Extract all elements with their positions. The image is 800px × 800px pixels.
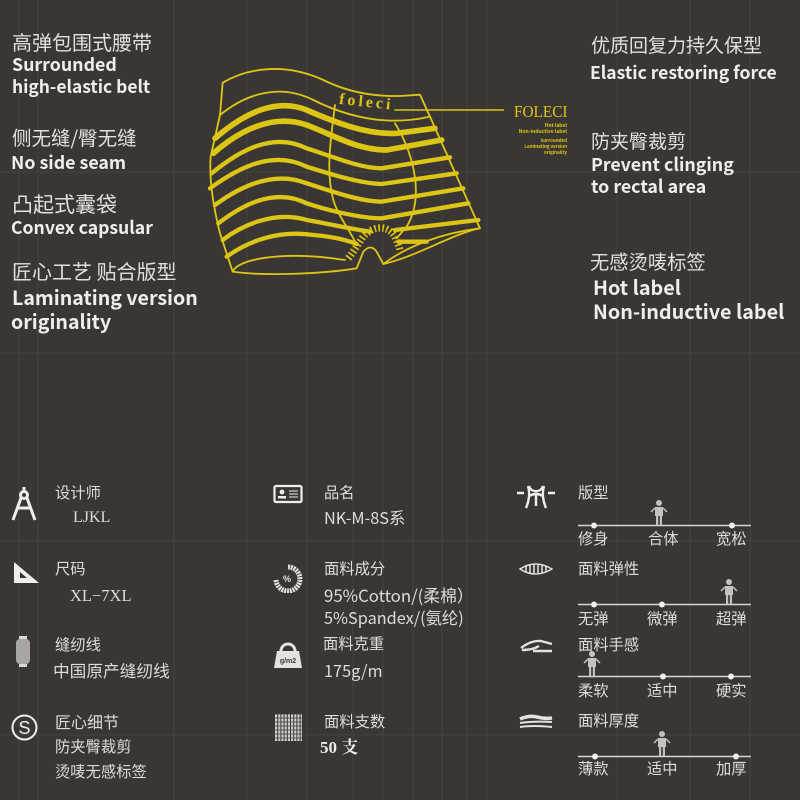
spec: thread xyxy=(16,633,170,682)
label callout: FOLECI: Hot label xyxy=(545,122,567,129)
icon: hand xyxy=(520,640,552,652)
spec: yarn count xyxy=(275,710,385,757)
heading: laminating version: 匠心工艺 贴合版型 xyxy=(12,256,176,285)
heading: convex capsular: 凸起式囊袋 xyxy=(12,189,117,219)
label callout: FOLECI: Surrounded xyxy=(540,138,567,144)
spec: craft detail: 防夹臀裁剪 xyxy=(55,735,132,757)
heading: no side seam: No side seam xyxy=(11,149,126,175)
brand mark: foleci on waistband: foleci xyxy=(338,91,394,114)
heading: hot label xyxy=(590,247,784,325)
scale: hand feel: 适中 xyxy=(647,679,678,701)
spec: composition: 95%Cotton/(柔棉） xyxy=(324,583,474,607)
scale: thickness: 适中 xyxy=(647,757,678,779)
heading: elastic restoring force: Elastic restoring force xyxy=(590,60,777,85)
heading: laminating version xyxy=(11,256,198,335)
spec: craft detail: 烫唛无感标签 xyxy=(55,760,147,782)
spec: product name: NK-M-8S系 xyxy=(324,505,405,529)
label callout: FOLECI xyxy=(513,102,567,156)
icon: compass xyxy=(12,487,36,520)
heading: hot label: Hot label xyxy=(593,272,681,301)
spec: yarn count: 50 支 xyxy=(320,738,358,757)
heading: no side seam xyxy=(11,122,137,175)
heading: elastic restoring force xyxy=(590,31,777,85)
heading: laminating version: Laminating version xyxy=(12,282,198,311)
heading: prevent clinging: Prevent clinging xyxy=(591,151,734,177)
scale: fit: 版型 xyxy=(578,481,609,503)
spec: craft detail xyxy=(12,709,147,782)
icon: waist fit xyxy=(517,486,555,508)
label callout: FOLECI: Laminating version xyxy=(524,144,567,150)
scale: elasticity: 面料弹性 xyxy=(578,557,639,579)
heading: no side seam: 侧无缝/臀无缝 xyxy=(12,122,137,151)
spec: size: 尺码 xyxy=(55,557,86,579)
spec: composition: 5%Spandex/(氨纶) xyxy=(324,605,464,629)
scale: hand feel: 硬实 xyxy=(716,679,747,701)
heading: prevent clinging: to rectal area xyxy=(591,173,706,199)
scale: hand feel: 柔软 xyxy=(578,679,609,701)
icon: thread spool xyxy=(16,636,30,667)
scale: fit: 合体 xyxy=(648,527,679,549)
spec: designer: LJKL xyxy=(73,509,110,526)
heading: surrounded belt: high-elastic belt xyxy=(12,74,150,99)
spec: thread: 中国原产缝纫线 xyxy=(53,658,170,682)
icon: fabric layers xyxy=(519,714,552,728)
scale: fit: 修身 xyxy=(578,527,609,549)
label callout: FOLECI: originality xyxy=(544,150,567,156)
heading: prevent clinging: 防夹臀裁剪 xyxy=(591,127,686,154)
scale: elasticity: 微弹 xyxy=(647,607,678,629)
label callout: FOLECI: Non-inductive label xyxy=(519,128,567,135)
heading: surrounded belt: Surrounded xyxy=(12,51,117,77)
icon: S badge: S xyxy=(18,718,31,738)
scale: thickness: 薄款 xyxy=(578,757,609,779)
spec: composition xyxy=(274,557,474,629)
icon: weight xyxy=(274,642,302,668)
spec: composition: 面料成分 xyxy=(324,557,385,579)
scale: hand feel xyxy=(520,633,751,701)
spec: weight: 175g/m xyxy=(324,658,383,682)
scale: thickness xyxy=(519,709,751,779)
heading: hot label: 无感烫唛标签 xyxy=(590,247,706,275)
spec: designer: 设计师 xyxy=(55,481,101,503)
icon: percent ring: % xyxy=(283,574,291,584)
scale: elasticity: 超弹 xyxy=(716,607,747,629)
heading: surrounded belt xyxy=(12,27,152,99)
spec: weight xyxy=(274,632,384,682)
heading: laminating version: originality xyxy=(11,306,111,335)
heading: convex capsular: Convex capsular xyxy=(11,215,153,240)
label callout: FOLECI: FOLECI xyxy=(513,102,567,121)
icon: S badge xyxy=(12,714,38,740)
spec: thread: 缝纫线 xyxy=(55,633,101,655)
icon: knit texture xyxy=(275,714,302,741)
icon: weight: g/m2 xyxy=(280,658,296,665)
scale: elasticity: 无弹 xyxy=(578,607,609,629)
heading: hot label: Non-inductive label xyxy=(593,296,784,325)
scale: fit xyxy=(517,481,751,549)
scale: hand feel: 面料手感 xyxy=(578,633,639,655)
scale: fit: 宽松 xyxy=(716,527,747,549)
spec: yarn count: 面料支数 xyxy=(324,710,385,732)
spec: designer xyxy=(12,481,110,526)
spec: weight: 面料克重 xyxy=(323,632,384,654)
spec: size xyxy=(14,557,132,605)
scale: thickness: 加厚 xyxy=(716,757,747,779)
spec: product name: 品名 xyxy=(324,481,355,503)
spec: craft detail: 匠心细节 xyxy=(55,709,119,733)
heading: prevent clinging xyxy=(591,127,734,199)
scale: elasticity xyxy=(519,557,751,629)
icon: percent ring xyxy=(274,564,302,593)
heading: convex capsular xyxy=(11,189,153,240)
icon: ID card xyxy=(273,484,303,504)
icon: stretch xyxy=(519,563,553,575)
icon: set square xyxy=(14,562,39,583)
heading: surrounded belt: 高弹包围式腰带 xyxy=(12,27,152,56)
spec: product name xyxy=(273,481,405,529)
scale: thickness: 面料厚度 xyxy=(578,709,639,731)
spec: size: XL−7XL xyxy=(70,586,132,605)
heading: elastic restoring force: 优质回复力持久保型 xyxy=(591,31,762,58)
